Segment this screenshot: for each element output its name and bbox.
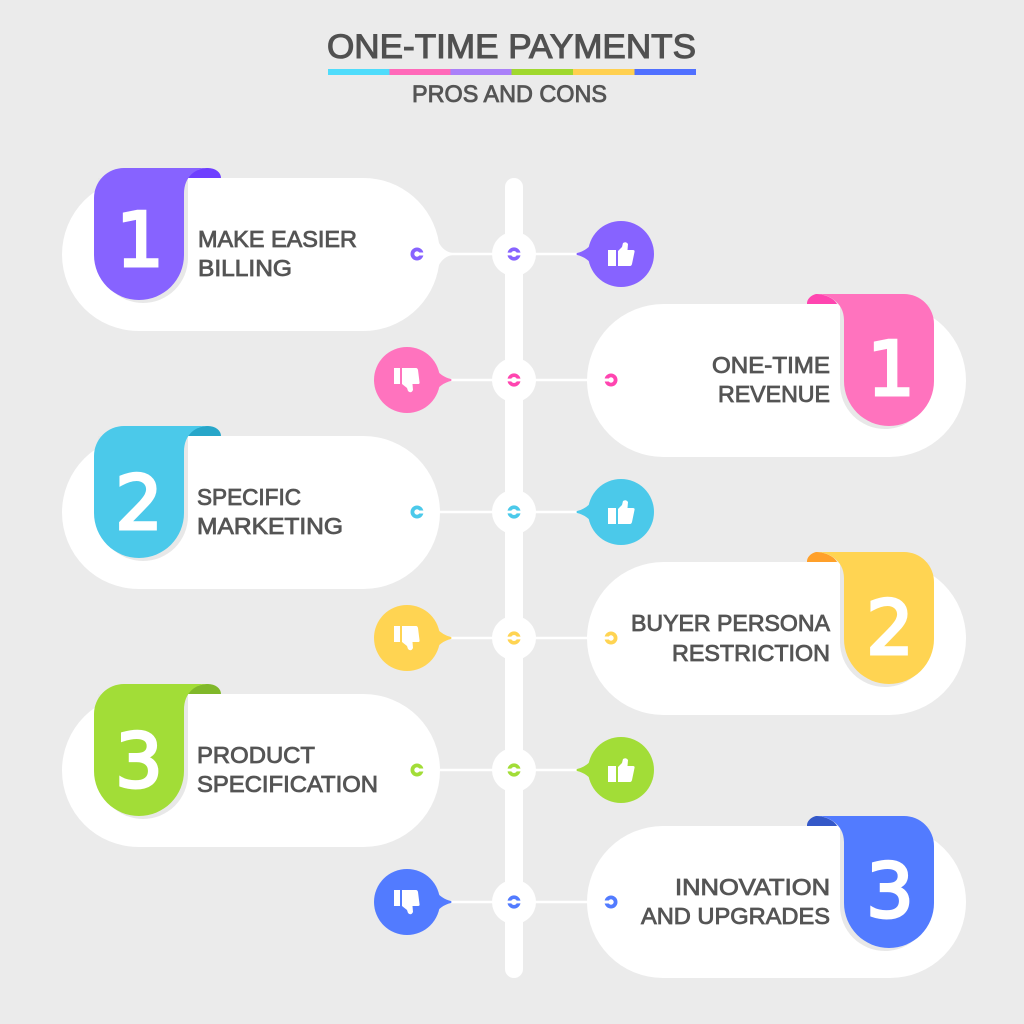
- label: BILLING: [198, 255, 292, 281]
- number: 1: [867, 325, 915, 413]
- panel: pro 2 specific marketing: [62, 426, 440, 589]
- label: [197, 484, 343, 539]
- card background: [62, 694, 440, 847]
- connector lines: [440, 254, 590, 902]
- central spine: [505, 178, 523, 978]
- spine nodes: [492, 232, 536, 924]
- label: [198, 226, 357, 281]
- label: BUYER PERSONA: [631, 610, 830, 636]
- ribbon: [816, 816, 934, 948]
- ribbon: [94, 426, 208, 558]
- icon: thumbs down yellow: [374, 605, 452, 671]
- ribbon fold: [187, 426, 221, 436]
- label: ONE-TIME: [712, 352, 830, 378]
- ring marker: [412, 507, 425, 517]
- ribbon shadow: [98, 436, 188, 561]
- label: AND UPGRADES: [641, 903, 830, 929]
- label: MAKE EASIER: [198, 226, 357, 252]
- ribbon fold: [807, 816, 837, 826]
- ribbon shadow: [98, 178, 188, 303]
- ribbon shadow: [836, 826, 930, 951]
- label: [197, 742, 378, 797]
- label: SPECIFIC: [197, 484, 301, 510]
- ribbon: [94, 168, 208, 300]
- number: 3: [866, 847, 914, 935]
- ring marker: [603, 633, 616, 643]
- ribbon fold: [807, 294, 837, 304]
- panel: con 2 buyer persona restriction: [587, 552, 966, 715]
- ribbon: [94, 684, 208, 816]
- ribbon shadow: [836, 562, 930, 687]
- icon: thumbs up cyan: [576, 479, 654, 545]
- panel: con 3 innovation and upgrades: [587, 816, 966, 978]
- number: 3: [115, 717, 163, 805]
- label: SPECIFICATION: [197, 771, 378, 797]
- title: ONE-TIME PAYMENTS: [327, 28, 696, 66]
- card background: [587, 826, 966, 978]
- panel: pro 1 make easier billing: [62, 168, 453, 331]
- number: 1: [116, 196, 164, 284]
- card background: [62, 436, 440, 589]
- ribbon shadow: [98, 694, 188, 819]
- ribbon fold: [807, 552, 837, 562]
- icon: thumbs down pink: [374, 347, 452, 413]
- card background: [587, 562, 966, 715]
- icon: thumbs down blue: [374, 869, 452, 935]
- card background: [62, 178, 453, 331]
- ring marker: [412, 249, 425, 259]
- label: PRODUCT: [197, 742, 315, 768]
- label: [641, 874, 830, 929]
- icon: thumbs up purple: [576, 221, 654, 287]
- ribbon fold: [187, 168, 221, 178]
- label: RESTRICTION: [672, 640, 830, 666]
- label: REVENUE: [718, 381, 830, 407]
- label: [712, 352, 830, 407]
- number: 2: [866, 584, 914, 672]
- panel: con 1 one-time revenue: [587, 294, 966, 457]
- number: 2: [115, 459, 163, 547]
- ring marker: [603, 897, 616, 907]
- label: INNOVATION: [675, 874, 830, 900]
- ribbon: [816, 552, 934, 684]
- icon: thumbs up green: [576, 737, 654, 803]
- ribbon shadow: [836, 304, 930, 429]
- ribbon fold: [187, 684, 221, 694]
- ribbon: [816, 294, 934, 426]
- title underline colour bar: [328, 69, 696, 75]
- ring marker: [603, 375, 616, 385]
- subtitle: PROS AND CONS: [412, 81, 607, 108]
- label: MARKETING: [197, 513, 343, 539]
- label: [631, 610, 830, 666]
- panel: pro 3 product specification: [62, 684, 440, 847]
- card background: [587, 304, 966, 457]
- ring marker: [412, 765, 425, 775]
